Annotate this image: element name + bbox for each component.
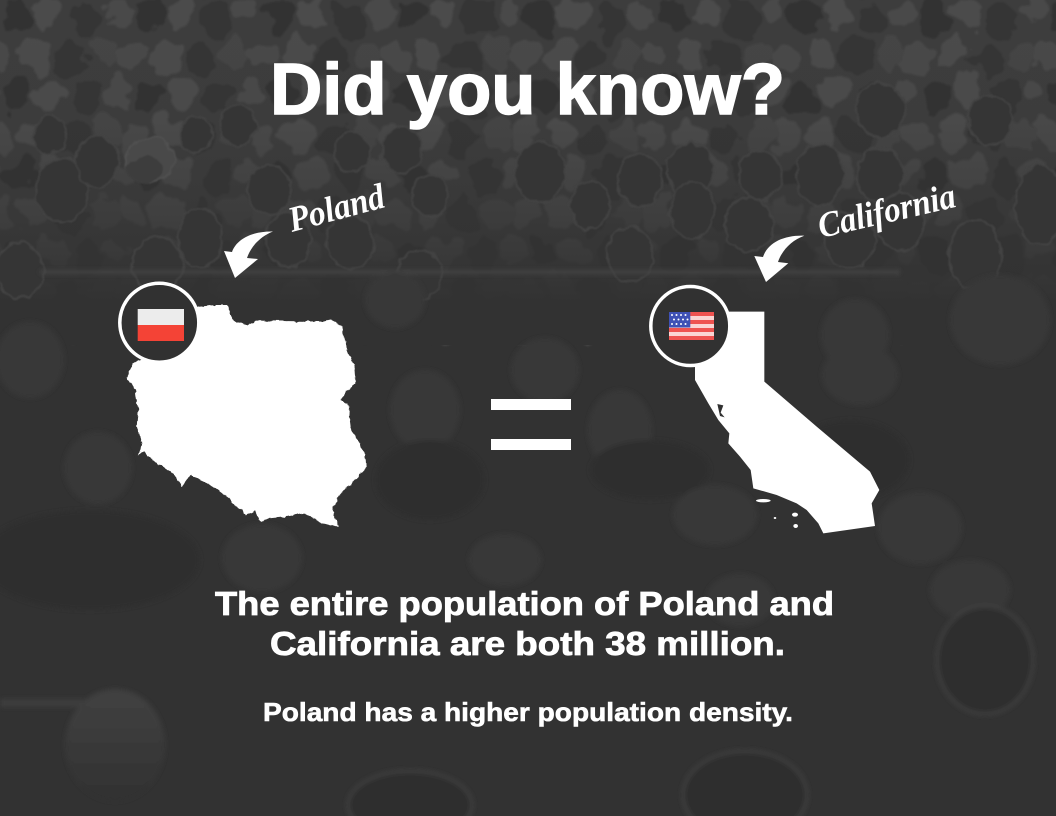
map: Poland bbox=[127, 305, 366, 527]
equals sign bbox=[491, 399, 571, 450]
text block: main statement: California are both 38 million. bbox=[270, 625, 785, 662]
map: California bbox=[695, 312, 879, 533]
title: Did you know? bbox=[270, 50, 785, 130]
label: Poland: Poland bbox=[283, 175, 390, 240]
text block: main statement: The entire population of Poland and bbox=[215, 585, 834, 622]
arrow: California bbox=[754, 236, 804, 282]
icon: US flag badge bbox=[651, 286, 730, 366]
arrow: Poland bbox=[224, 231, 273, 278]
label: California: California bbox=[814, 175, 959, 246]
text block: main statement bbox=[215, 585, 834, 662]
text block: density note: Poland has a higher population density. bbox=[263, 697, 793, 727]
icon: Polish flag badge bbox=[120, 283, 199, 362]
panel: California bbox=[651, 175, 959, 533]
panel: Poland bbox=[120, 175, 390, 527]
